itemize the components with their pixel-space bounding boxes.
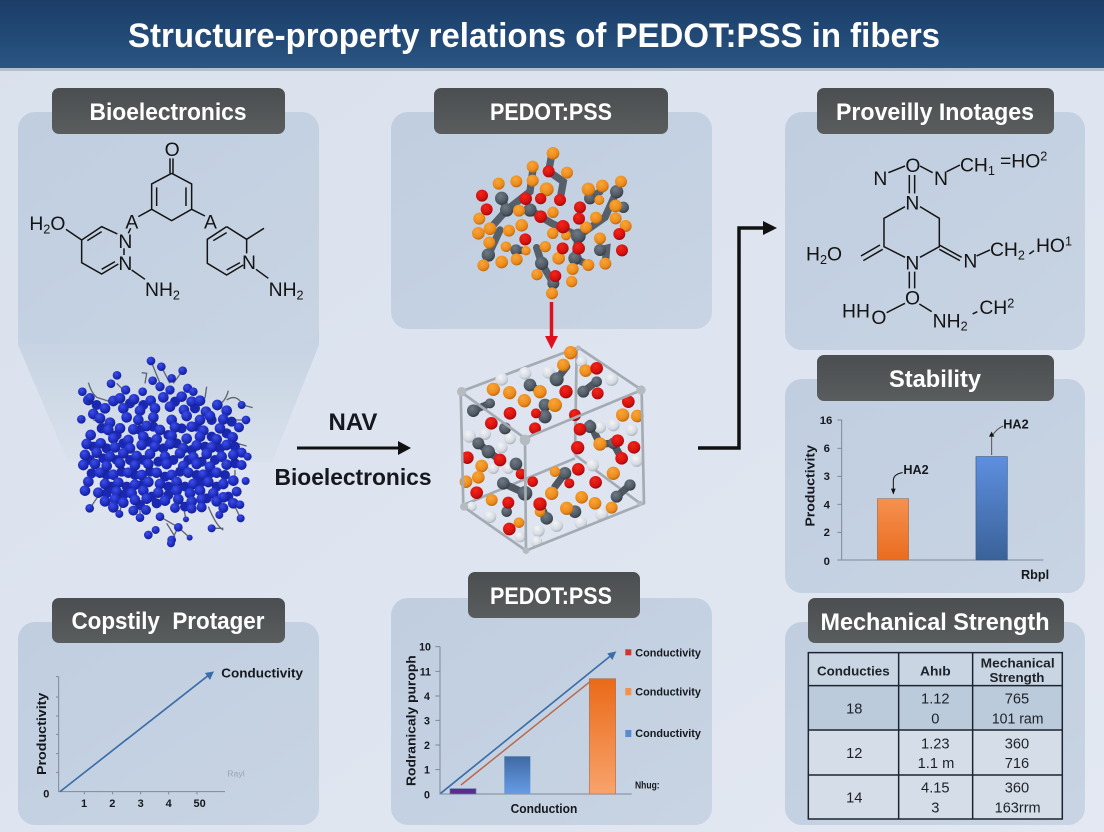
bar chart: productivity: Productivity xyxy=(803,444,818,527)
molecule: cube lattice xyxy=(457,345,646,554)
bar: orange xyxy=(877,499,909,560)
chemical structure: property molecule: O xyxy=(905,156,920,177)
panel: PEDOT:PSS molecule xyxy=(391,88,712,329)
table: conductivity and strength values: Ahıb xyxy=(920,663,951,678)
chemical structure: property molecule: O xyxy=(827,245,842,266)
back layer of atoms xyxy=(85,397,240,512)
chemical structure: property molecule: N xyxy=(873,169,887,190)
line chart: productivity vs conductivity: 2 xyxy=(109,798,115,810)
chemical structure: property molecule: 2 xyxy=(1007,296,1014,310)
chemical structure: property molecule xyxy=(806,150,1072,334)
lattice front frame xyxy=(461,390,644,551)
arrow: NAV horizontal xyxy=(297,441,411,455)
lattice back frame xyxy=(461,347,642,505)
panel: PEDOT:PSS conduction chart xyxy=(391,572,712,825)
bar chart: conduction: 3 xyxy=(424,715,430,727)
table: conductivity and strength values: 18 xyxy=(846,701,862,717)
bar chart: conduction: 11 xyxy=(420,666,431,678)
bar chart: conduction: 2 xyxy=(424,740,430,752)
chemical structure: bioelectronics molecule: 2 xyxy=(173,288,180,302)
chemical structure: property molecule: 2 xyxy=(961,320,968,334)
bar chart: productivity: 0 xyxy=(824,556,830,568)
bar chart: conduction xyxy=(404,642,702,816)
bar: blue xyxy=(504,756,530,794)
chemical structure: bioelectronics molecule: O xyxy=(50,214,65,235)
heading: PEDOT:PSS: PEDOT:PSS xyxy=(490,99,612,126)
heading: bioelectronics: Bioelectronics xyxy=(90,99,246,126)
chemical structure: property molecule: HO xyxy=(1036,236,1065,257)
chemical structure: bioelectronics molecule: N xyxy=(118,232,132,253)
table: conductivity and strength values xyxy=(808,653,1062,819)
chemical structure: property molecule: CH xyxy=(960,156,988,177)
line chart: productivity vs conductivity: 1 xyxy=(81,798,87,810)
table: conductivity and strength values: 12 xyxy=(846,746,862,762)
chemical structure: bioelectronics molecule xyxy=(29,140,304,302)
bar chart: conduction: 0 xyxy=(424,789,430,801)
line chart: productivity vs conductivity: 3 xyxy=(138,798,144,810)
heading: copstily protager: Copstily Protager xyxy=(72,608,264,635)
bar chart: conduction: 1 xyxy=(424,765,430,777)
chemical structure: property molecule: N xyxy=(905,193,919,214)
heading: copstily protager xyxy=(52,598,285,643)
bar chart: conduction: Rodranicaly puroph xyxy=(404,655,419,786)
chemical structure: bioelectronics molecule: A xyxy=(125,213,138,234)
heading: PEDOT:PSS chart xyxy=(468,572,640,618)
line chart: productivity vs conductivity xyxy=(34,665,304,810)
annotation: HA2 orange xyxy=(891,463,929,495)
heading: PEDOT:PSS xyxy=(434,88,668,134)
annotation: HA2 blue: HA2 xyxy=(1003,418,1029,432)
bar chart: productivity: Rbpl xyxy=(1021,568,1049,582)
bar chart: productivity: 4 xyxy=(824,499,831,511)
panel: copstily protager xyxy=(18,598,319,825)
table: conductivity and strength values: 14 xyxy=(846,790,862,806)
chemical structure: property molecule: =HO xyxy=(1000,151,1040,172)
heading: stability: Stability xyxy=(889,366,982,393)
heading: Proveilly Inotages xyxy=(817,88,1054,134)
chemical structure: property molecule: CH xyxy=(990,240,1018,261)
panel: property notes xyxy=(785,88,1085,350)
heading: Proveilly Inotages: Proveilly Inotages xyxy=(836,99,1034,126)
chemical structure: bioelectronics molecule: A xyxy=(204,213,217,234)
chemical structure: bioelectronics molecule: 2 xyxy=(297,288,304,302)
line chart: productivity vs conductivity: Rayl xyxy=(227,769,245,779)
bar chart: productivity: 2 xyxy=(824,527,830,539)
chemical structure: property molecule: HH xyxy=(842,301,870,322)
line chart: productivity vs conductivity: 0 xyxy=(43,789,49,801)
bar chart: productivity: 16 xyxy=(820,415,832,427)
heading: bioelectronics xyxy=(52,88,285,134)
chemical structure: bioelectronics molecule: NH xyxy=(269,280,297,301)
legend: Conductivity xyxy=(635,648,702,660)
table: conductivity and strength values: 0 xyxy=(931,711,939,727)
line chart: productivity vs conductivity: Productivity xyxy=(34,692,49,775)
panel: mechanical strength xyxy=(785,598,1085,825)
bar chart: conduction: Conduction xyxy=(511,802,577,816)
chemical structure: bioelectronics molecule: NH xyxy=(145,280,173,301)
heading: PEDOT:PSS chart: PEDOT:PSS xyxy=(490,583,612,610)
table: conductivity and strength values: 101 ram xyxy=(992,711,1043,727)
bar chart: conduction: Nhug: xyxy=(635,781,660,792)
bar chart: productivity: 6 xyxy=(824,443,830,455)
table: conductivity and strength values: 1.23 xyxy=(921,736,950,752)
heading: mechanical strength xyxy=(808,598,1064,643)
legend xyxy=(625,648,702,740)
chemical structure: property molecule: CH xyxy=(979,298,1007,319)
table: conductivity and strength values: 4.15 xyxy=(921,780,950,796)
annotation: HA2 orange: HA2 xyxy=(903,463,929,477)
funnel connecting panel to blue molecule xyxy=(18,325,319,462)
bar chart: conduction: 4 xyxy=(424,691,430,703)
chemical structure: bioelectronics molecule: O xyxy=(165,140,180,161)
chemical structure: property molecule: 2 xyxy=(820,253,827,267)
table: conductivity and strength values: 3 xyxy=(931,800,939,816)
chemical structure: bioelectronics molecule: N xyxy=(242,253,256,274)
line chart: productivity vs conductivity: 4 xyxy=(166,798,173,810)
chemical structure: property molecule: 2 xyxy=(1018,248,1025,262)
chemical structure: bioelectronics molecule: 2 xyxy=(43,222,50,236)
table: conductivity and strength values: 765 xyxy=(1005,692,1029,708)
chemical structure: property molecule: N xyxy=(934,169,948,190)
molecule: orange and red cluster xyxy=(472,147,632,299)
header banner with title: Structure-property relations of PEDOT:PSS in fibers xyxy=(128,17,940,55)
legend: Conductivity xyxy=(635,728,702,740)
label: bioelectronics: Bioelectronics xyxy=(274,464,432,490)
table: conductivity and strength values: Mechanical xyxy=(981,655,1055,670)
heading: mechanical strength: Mechanical Strength xyxy=(820,609,1050,636)
chemical structure: property molecule: NH xyxy=(933,311,961,332)
chemical structure: property molecule: N xyxy=(963,251,977,272)
arrow: red downward xyxy=(545,302,558,349)
chemical structure: property molecule: 1 xyxy=(988,164,995,178)
chemical structure: property molecule: N xyxy=(905,253,919,274)
panel: stability xyxy=(785,355,1085,593)
line chart: productivity vs conductivity: 50 xyxy=(194,798,206,810)
bar chart: productivity xyxy=(803,415,1049,582)
bar: blue xyxy=(976,457,1007,560)
table: conductivity and strength values: 360 xyxy=(1005,780,1029,796)
chemical structure: property molecule: O xyxy=(905,289,920,310)
molecule: blue polymer network xyxy=(77,357,253,547)
heading: stability xyxy=(817,355,1054,401)
panel: bioelectronics xyxy=(18,88,319,462)
chemical structure: bioelectronics molecule: N xyxy=(118,254,132,275)
line chart: productivity vs conductivity: Conductivity xyxy=(221,665,304,680)
chemical structure: property molecule: O xyxy=(871,308,886,329)
arrow: elbow to property panel xyxy=(698,221,777,448)
front layer of atoms xyxy=(77,357,252,547)
chemical structure: property molecule: H xyxy=(806,245,820,266)
table: conductivity and strength values: 360 xyxy=(1005,736,1029,752)
label: NAV: NAV xyxy=(329,409,377,436)
bar: orange xyxy=(589,679,616,794)
bar: purple xyxy=(450,789,476,794)
annotation: HA2 blue xyxy=(989,418,1029,455)
table: conductivity and strength values: 1.1 m xyxy=(918,756,954,772)
chemical structure: property molecule: 1 xyxy=(1065,234,1072,248)
table: conductivity and strength values: Strength xyxy=(989,670,1044,685)
legend: Conductivity xyxy=(635,687,702,699)
table: conductivity and strength values: Conducties xyxy=(817,663,890,678)
table: conductivity and strength values: 163rrm xyxy=(995,800,1041,816)
bar chart: productivity: 3 xyxy=(824,471,830,483)
header banner with title xyxy=(0,0,1104,71)
bar chart: conduction: 10 xyxy=(419,642,431,654)
chemical structure: bioelectronics molecule: H xyxy=(29,214,43,235)
table: conductivity and strength values: 1.12 xyxy=(921,692,950,708)
chemical structure: property molecule: 2 xyxy=(1040,150,1047,164)
table: conductivity and strength values: 716 xyxy=(1005,756,1029,772)
